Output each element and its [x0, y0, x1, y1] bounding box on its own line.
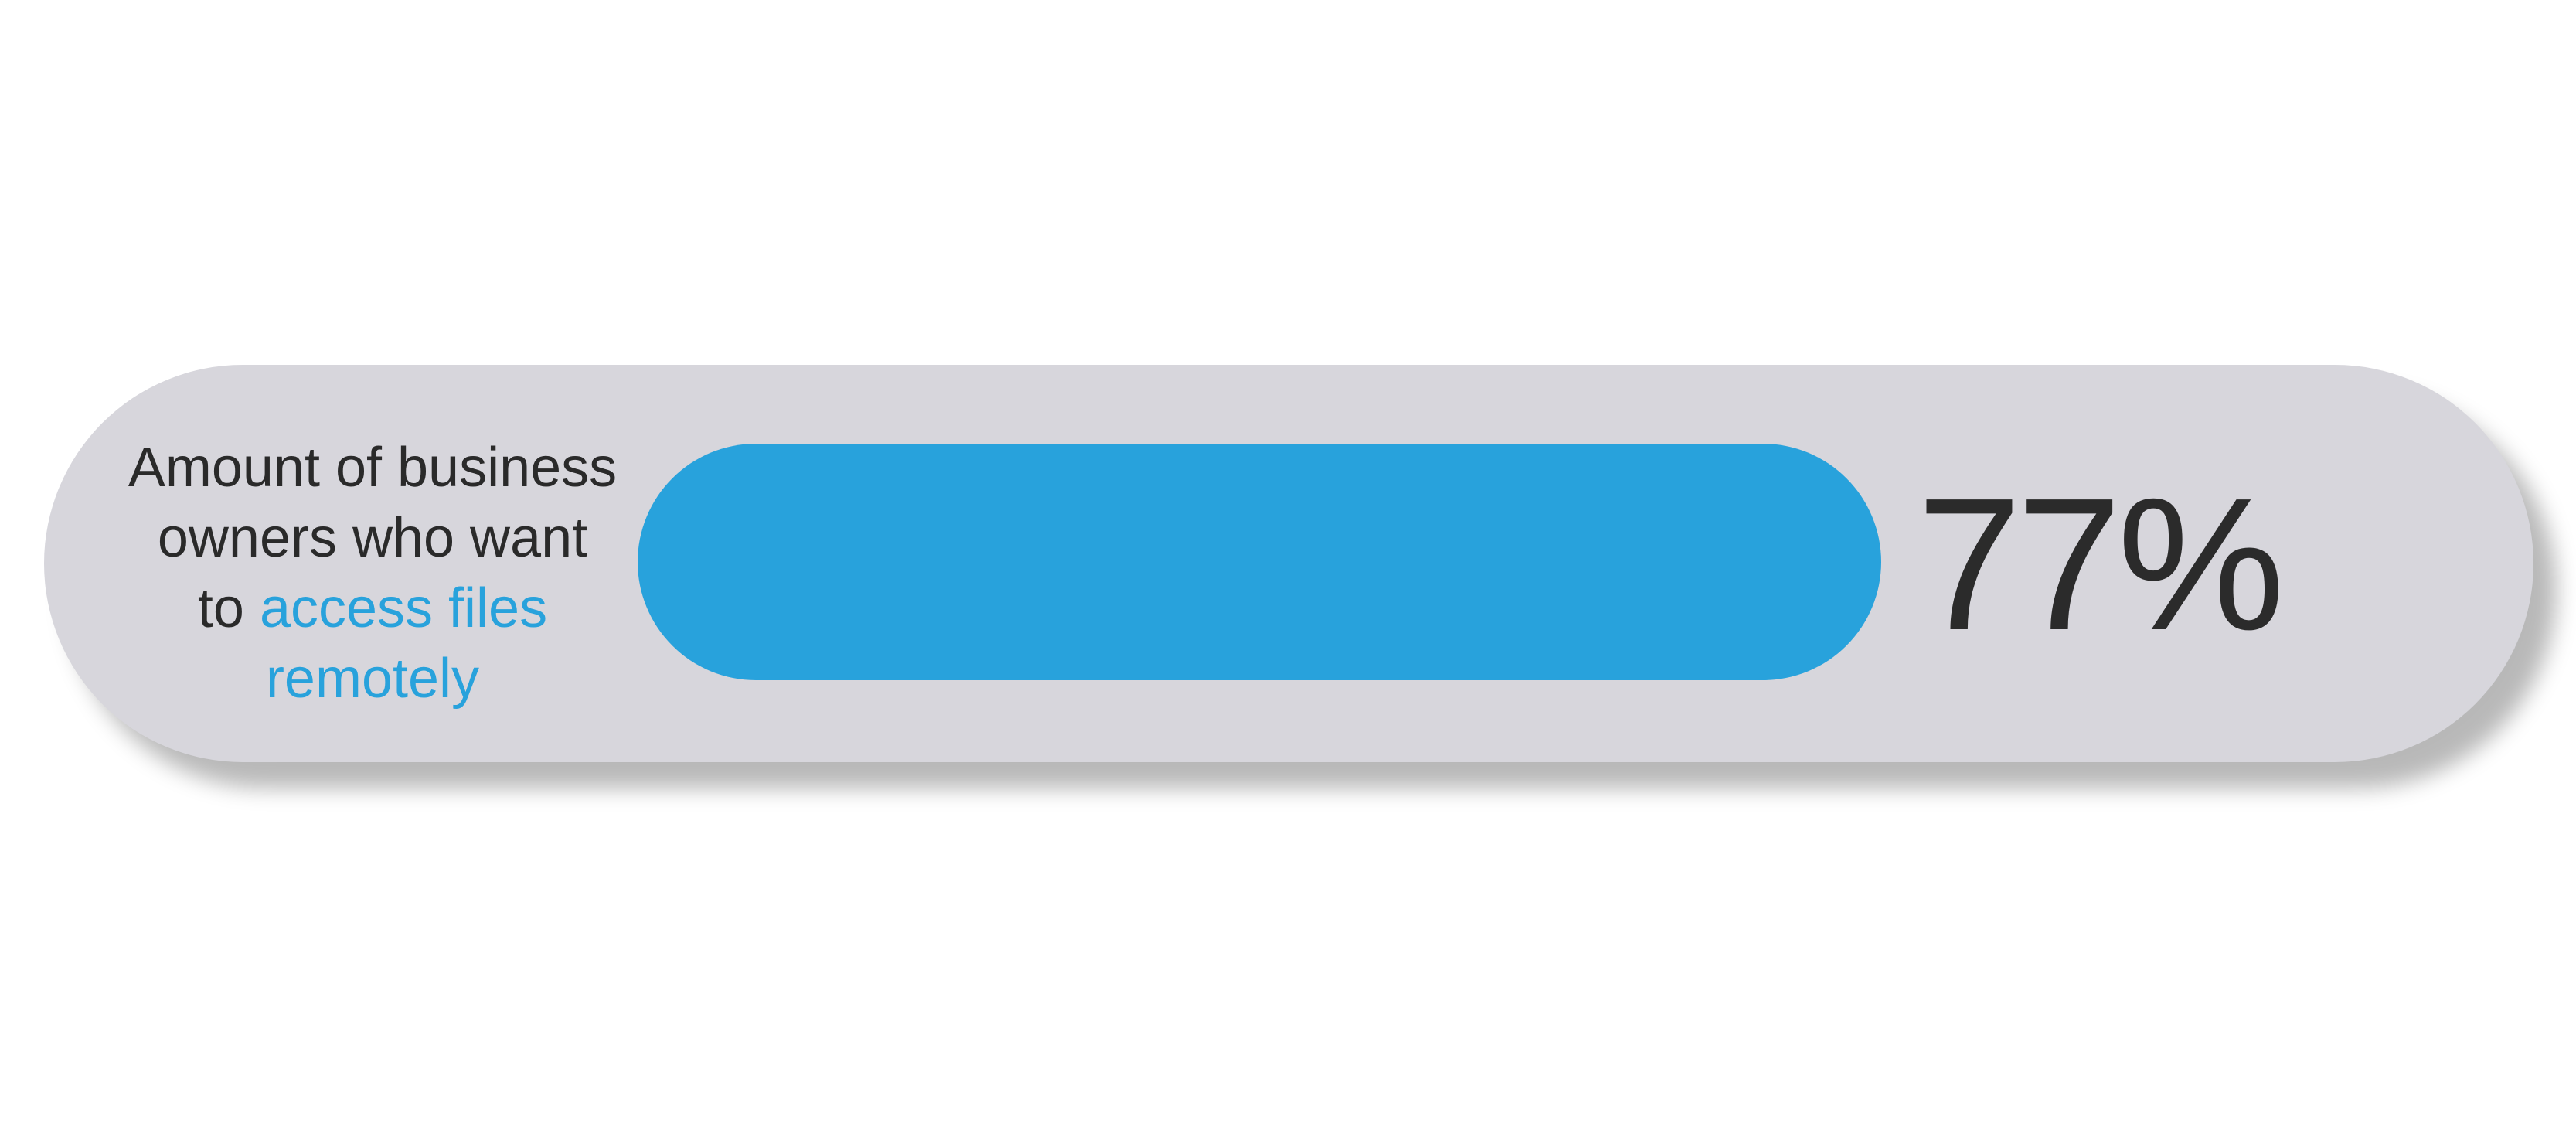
text: label [128, 437, 617, 710]
text: label: to access files [198, 577, 547, 639]
text: label: owners who want [158, 507, 587, 569]
panel: stat pill [44, 365, 2533, 762]
text: label: Amount of business [128, 437, 617, 499]
text: percentage: 77% [1917, 458, 2280, 669]
text: label: remotely [266, 648, 479, 710]
bar: progress fill [638, 444, 1881, 680]
